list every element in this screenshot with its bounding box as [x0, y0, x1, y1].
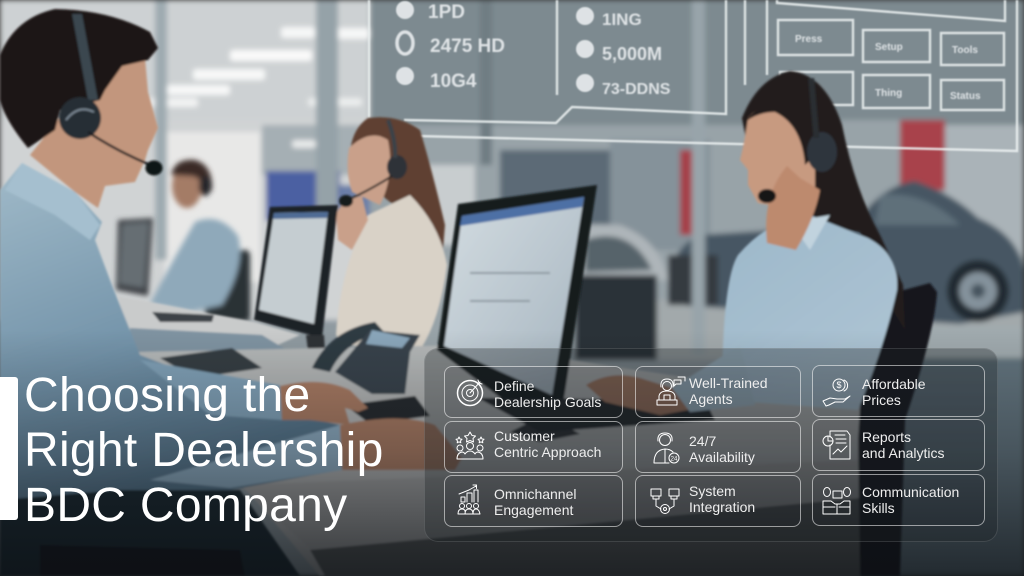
text: Agents [689, 391, 733, 407]
text [689, 433, 755, 465]
back man [205, 250, 250, 322]
HUD overlay: Tools [952, 45, 978, 56]
text: and Analytics [862, 445, 944, 461]
text: Engagement [494, 502, 573, 518]
text: Skills [862, 500, 895, 516]
text [862, 484, 959, 516]
main monitor [437, 185, 597, 425]
title [24, 369, 384, 532]
HUD overlay: Setup [875, 42, 903, 53]
far monitor [116, 218, 153, 296]
card: Affordable Prices [812, 365, 985, 417]
dark vignette toward bottom [0, 330, 1024, 576]
text: Integration [689, 499, 755, 515]
icon: support agent with 24 badge: 24 [671, 456, 678, 462]
HUD overlay: 1ING [602, 10, 642, 29]
icon: hand with coins [822, 378, 850, 406]
HUD overlay: 2475 HD [430, 36, 505, 57]
icon: report with charts [822, 430, 850, 460]
middle monitor [254, 205, 338, 338]
icon: customers with stars [456, 432, 484, 460]
text: Omnichannel [494, 486, 576, 502]
woman 2 [350, 117, 445, 262]
card: Well-Trained Agents [635, 366, 801, 418]
icon: connected systems and gear [650, 488, 680, 514]
text: Availability [689, 449, 755, 465]
text: Affordable [862, 376, 926, 392]
pillar [692, 0, 705, 355]
icon: agent with laptop [656, 376, 686, 406]
text [862, 376, 926, 408]
card: System Integration [635, 475, 801, 527]
card: Define Dealership Goals [444, 366, 623, 418]
HUD overlay: 1PD [428, 2, 465, 23]
text [494, 486, 576, 518]
text: 24/7 [689, 433, 716, 449]
HUD overlay: Press [795, 34, 823, 45]
white parked car [500, 224, 668, 285]
title: Right Dealership [24, 424, 384, 477]
HUD overlay [369, 0, 1017, 151]
text: System [689, 483, 736, 499]
icon: hand with coins: $ [836, 380, 842, 390]
text: Dealership Goals [494, 394, 601, 410]
title: Choosing the [24, 369, 310, 422]
card: 24/7 Availability [635, 421, 801, 473]
text: Communication [862, 484, 959, 500]
main desk [135, 345, 870, 576]
text [494, 378, 601, 410]
dark bin [575, 275, 657, 360]
text: Centric Approach [494, 444, 601, 460]
blue parked car [668, 181, 1024, 324]
HUD overlay: 73-DDNS [602, 81, 671, 98]
text [689, 483, 755, 515]
woman 1 hair [742, 71, 905, 330]
HUD overlay: Thing [875, 88, 902, 99]
text: Define [494, 378, 534, 394]
title accent bar [0, 377, 18, 520]
left man body [0, 163, 340, 545]
icon: growth chart and people [458, 484, 480, 514]
card: Omnichannel Engagement [444, 475, 623, 527]
icon: target [456, 380, 484, 406]
text: Well-Trained [689, 375, 768, 391]
panel: features grid [424, 348, 998, 542]
title: BDC Company [24, 479, 347, 532]
left man hands [345, 396, 430, 424]
HUD overlay: 10G4 [430, 71, 477, 92]
text [689, 375, 768, 407]
woman 1 face [740, 103, 815, 222]
icon: two people talking [822, 487, 851, 514]
card: Communication Skills [812, 474, 985, 526]
floor [575, 300, 1024, 360]
back desk [118, 296, 300, 352]
phone [312, 322, 384, 372]
text: Reports [862, 429, 911, 445]
glass columns [155, 0, 167, 260]
card: Customer Centric Approach [444, 421, 623, 473]
HUD overlay: 5,000M [602, 44, 662, 64]
card: Reports and Analytics [812, 419, 985, 471]
woman 1 shirt [722, 215, 897, 410]
text [494, 428, 601, 460]
dark floor at lower right [860, 358, 1024, 576]
left man head [30, 58, 158, 208]
text: Customer [494, 428, 555, 444]
icon: support agent with 24 badge [654, 432, 680, 464]
text [862, 429, 944, 461]
text: Prices [862, 392, 901, 408]
woman 1 chair [858, 283, 937, 576]
HUD overlay: Status [950, 91, 981, 102]
ceiling lights [230, 50, 312, 61]
keyboard left [160, 348, 262, 378]
